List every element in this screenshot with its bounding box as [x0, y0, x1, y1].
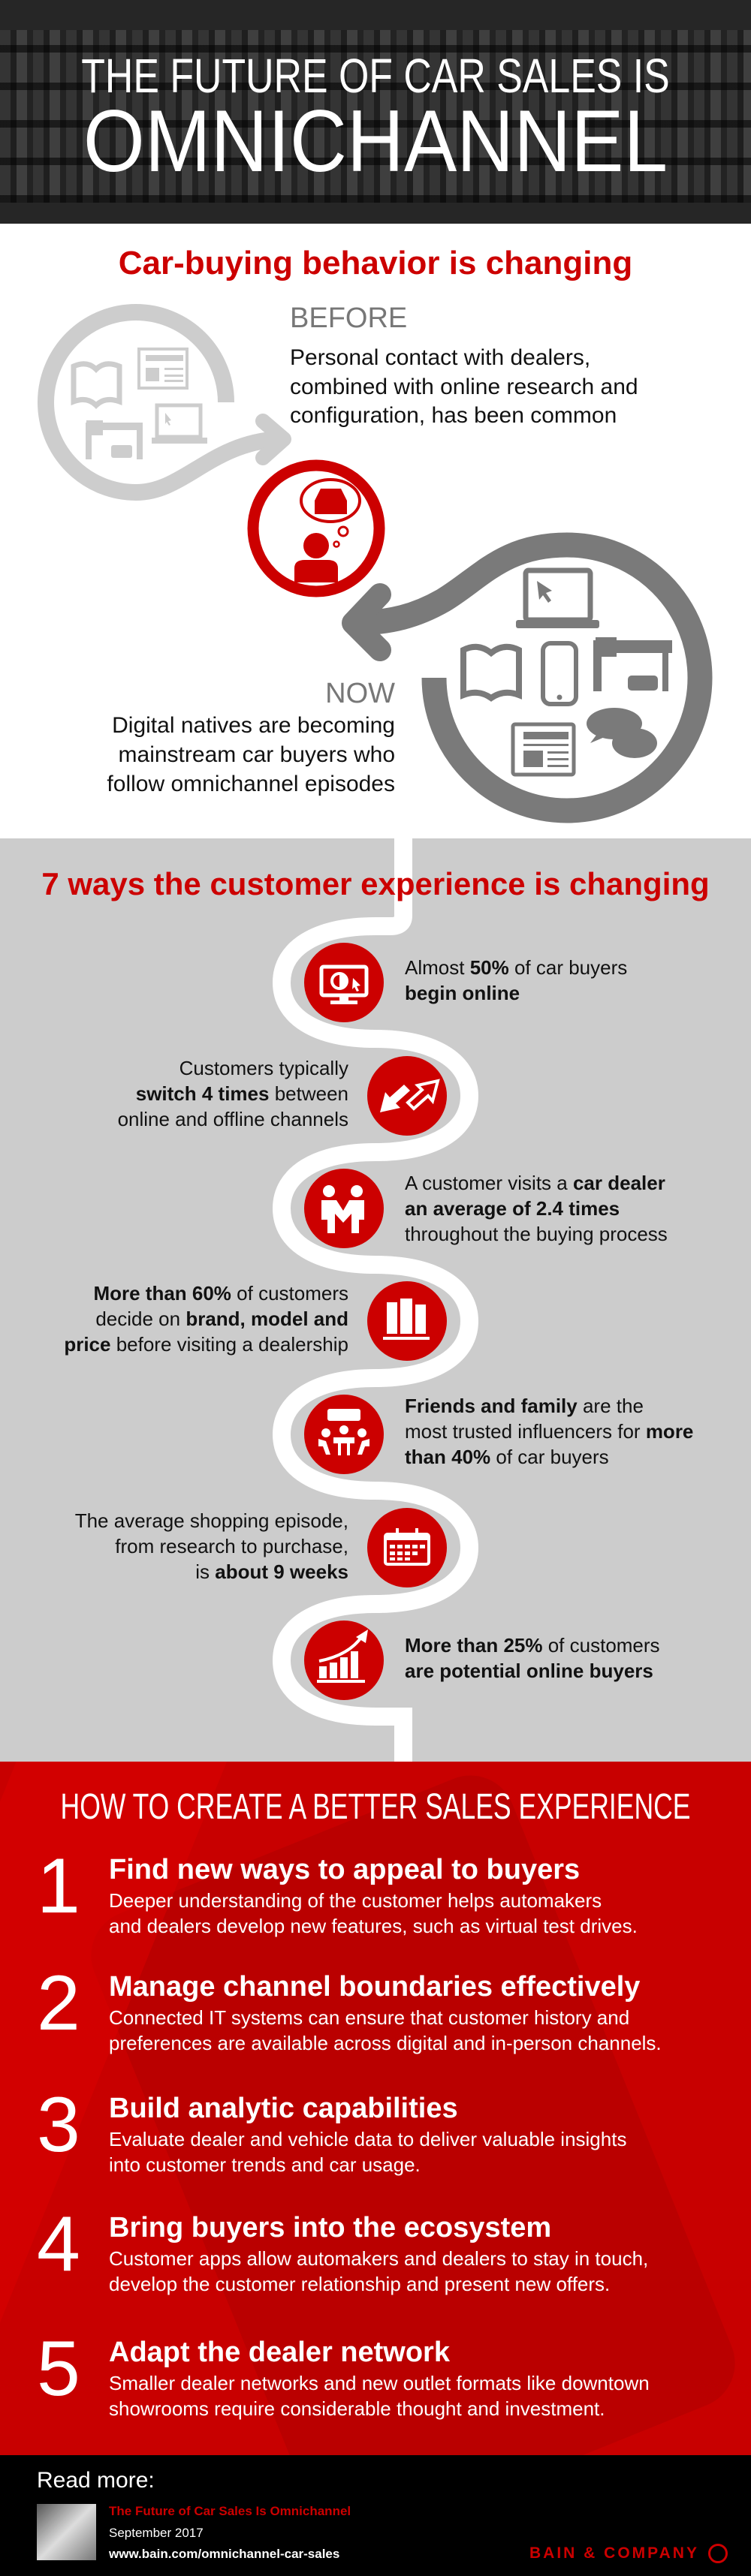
item 1 — [37, 1843, 638, 1937]
text: now: NOW — [325, 678, 395, 709]
icon: calendar — [367, 1508, 447, 1587]
text: 60% decide: More than 60% of customers — [93, 1282, 348, 1305]
text: before — [290, 302, 638, 428]
item 3: Build analytic capabilities — [109, 2093, 458, 2124]
text: car dealer visits — [405, 1172, 668, 1245]
article link: September 2017 — [109, 2525, 204, 2540]
item 2 — [37, 1960, 662, 2054]
icon: bar chart — [367, 1281, 447, 1361]
text: before: configuration, has been common — [290, 403, 617, 428]
text: friends and family: than 40% of car buyers — [405, 1446, 609, 1468]
item 5: Smaller dealer networks and new outlet formats like downtown — [109, 2372, 650, 2394]
text: 60% decide — [64, 1282, 348, 1356]
text: before: BEFORE — [290, 302, 407, 334]
winding path with icons — [41, 838, 710, 1762]
text: 60% decide: decide on brand, model and — [95, 1308, 348, 1330]
diagram: before and now cycle — [38, 304, 712, 823]
title: OMNICHANNEL — [83, 92, 668, 190]
item 3: into customer trends and car usage. — [109, 2153, 421, 2176]
panel: how to create a better sales experience: 4 — [37, 2201, 80, 2288]
text: 50% begin online — [405, 956, 627, 1004]
heading: how to create: HOW TO CREATE A BETTER SALES EXPERIENCE — [61, 1787, 690, 1827]
text: friends and family — [405, 1395, 693, 1468]
header banner — [0, 0, 751, 224]
text: 60% decide: price before visiting a dealership — [64, 1333, 348, 1356]
item 2: preferences are available across digital and in-person channels. — [109, 2032, 662, 2054]
text: 50% begin online: Almost 50% of car buyers — [405, 956, 627, 979]
thumbnail — [37, 2504, 96, 2560]
item 4: Bring buyers into the ecosystem — [109, 2212, 551, 2243]
text: car dealer visits: an average of 2.4 times — [405, 1197, 620, 1220]
now loop — [353, 545, 700, 811]
icon: computer — [304, 943, 384, 1022]
icon: friends and family — [304, 1395, 384, 1474]
text: 50% begin online: begin online — [405, 982, 520, 1004]
item 2: Manage channel boundaries effectively — [109, 1971, 640, 2003]
icon: customer thinking of car — [253, 465, 379, 591]
item 1: and dealers develop new features, such as virtual test drives. — [109, 1915, 638, 1937]
logo: bain & company: BAIN & COMPANY — [529, 2544, 699, 2562]
text: friends and family: most trusted influencers for more — [405, 1420, 693, 1443]
text: switch 4 times: switch 4 times between — [136, 1082, 348, 1105]
heading: car-buying behavior: Car-buying behavior is changing — [119, 245, 632, 281]
item 1: Deeper understanding of the customer helps automakers — [109, 1889, 602, 1912]
item 4: develop the customer relationship and present new offers. — [109, 2273, 610, 2295]
heading: 7 ways: 7 ways the customer experience is changing — [41, 866, 710, 901]
icon: growth chart — [304, 1621, 384, 1700]
item 3: Evaluate dealer and vehicle data to deliver valuable insights — [109, 2128, 626, 2150]
text: 25% online buyers: More than 25% of customers — [405, 1634, 660, 1657]
item 4: Customer apps allow automakers and dealers to stay in touch, — [109, 2247, 648, 2270]
item 5: showrooms require considerable thought and investment. — [109, 2397, 605, 2420]
icon: switch arrows — [367, 1056, 447, 1136]
panel: how to create a better sales experience — [0, 1762, 751, 2455]
text: now: mainstream car buyers who — [119, 742, 395, 767]
item 5 — [37, 2325, 650, 2420]
item 2: Connected IT systems can ensure that customer history and — [109, 2006, 629, 2029]
text: switch 4 times: online and offline channels — [118, 1108, 348, 1130]
text: 9 weeks: is about 9 weeks — [195, 1560, 348, 1583]
text: before: Personal contact with dealers, — [290, 345, 590, 370]
text: 9 weeks: from research to purchase, — [115, 1535, 348, 1557]
before loop — [46, 312, 284, 492]
read more label: Read more: — [37, 2468, 155, 2493]
text: 9 weeks: The average shopping episode, — [75, 1509, 348, 1532]
article link: The Future of Car Sales Is Omnichannel — [109, 2504, 351, 2518]
text: friends and family: Friends and family are the — [405, 1395, 644, 1417]
text: car dealer visits: A customer visits a car dealer — [405, 1172, 665, 1194]
text: now: follow omnichannel episodes — [107, 772, 395, 796]
text: 25% online buyers: are potential online buyers — [405, 1660, 653, 1682]
panel: 7 ways — [0, 838, 751, 1762]
title: THE FUTURE OF CAR SALES IS — [81, 49, 670, 103]
footer — [0, 2455, 751, 2576]
article link — [109, 2504, 351, 2561]
text: switch 4 times: Customers typically — [179, 1057, 348, 1079]
icon: handshake — [304, 1169, 384, 1248]
text: car dealer visits: throughout the buying process — [405, 1223, 668, 1245]
text: before: combined with online research and — [290, 374, 638, 399]
panel: how to create a better sales experience: 3 — [37, 2081, 80, 2168]
article link: www.bain.com/omnichannel-car-sales — [109, 2547, 339, 2561]
text: switch 4 times — [118, 1057, 348, 1130]
item 3 — [37, 2081, 626, 2176]
title — [81, 49, 670, 190]
text: 9 weeks — [75, 1509, 348, 1583]
text: now — [107, 678, 395, 796]
item 1: Find new ways to appeal to buyers — [109, 1854, 580, 1885]
text: now: Digital natives are becoming — [112, 713, 395, 738]
item 5: Adapt the dealer network — [109, 2337, 450, 2368]
text: 25% online buyers — [405, 1634, 660, 1682]
panel: how to create a better sales experience: 1 — [37, 1843, 80, 1930]
panel: how to create a better sales experience: 2 — [37, 1960, 80, 2047]
panel: how to create a better sales experience: 5 — [37, 2325, 80, 2412]
item 4 — [37, 2201, 648, 2295]
